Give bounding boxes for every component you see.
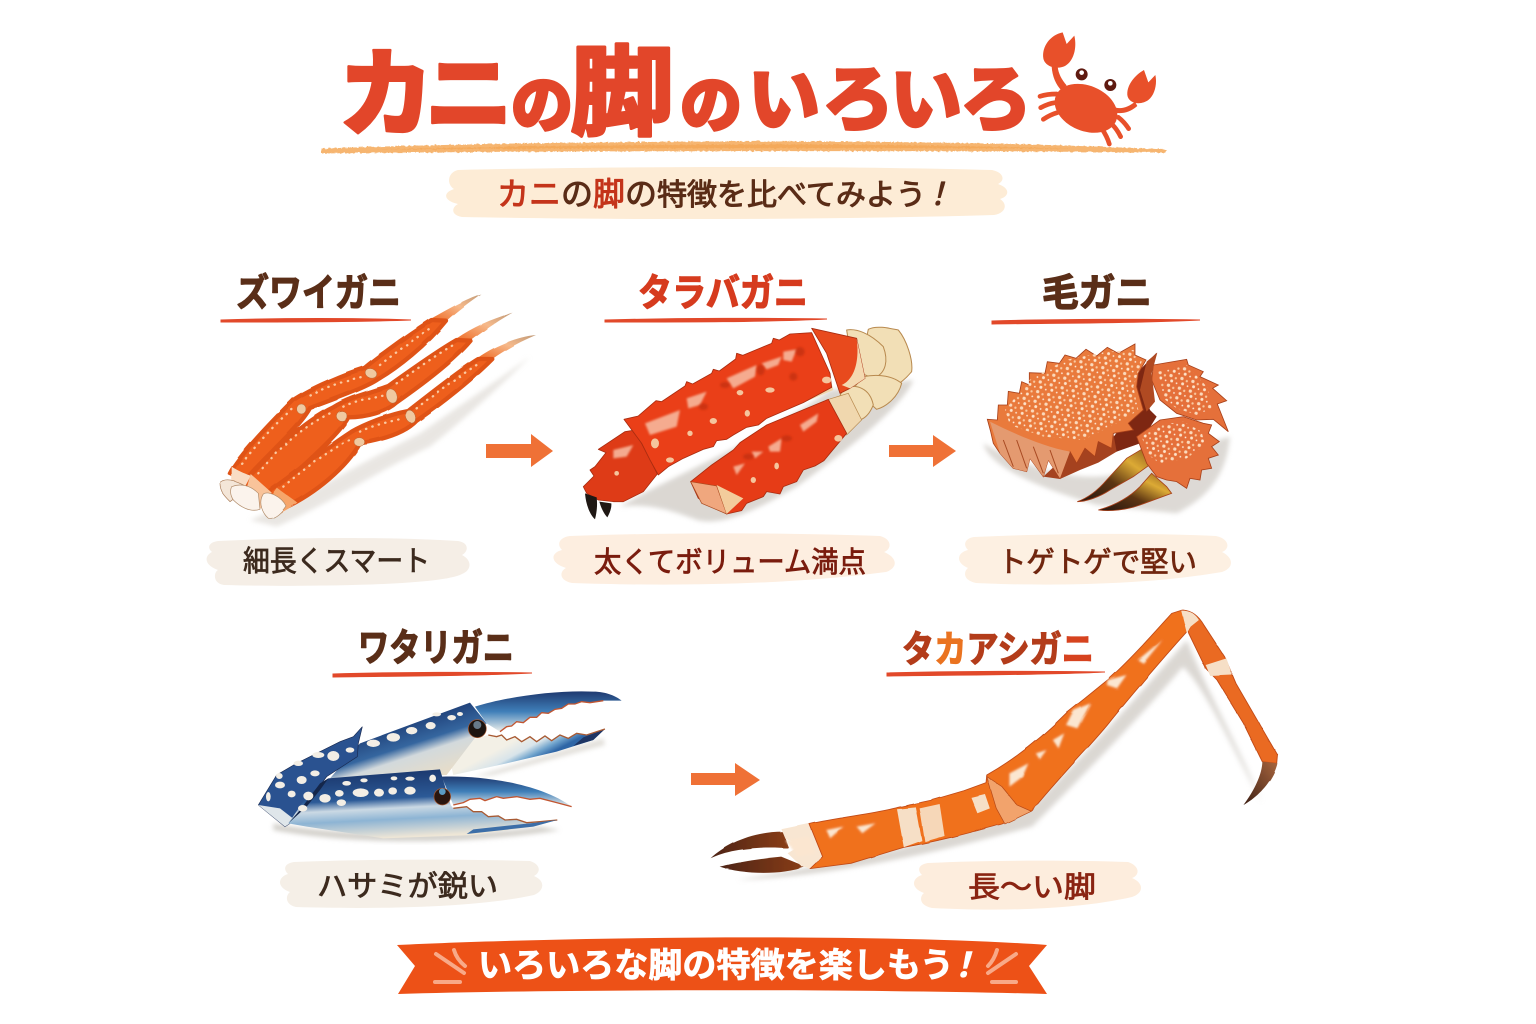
illustration: blue crab claws (258, 691, 622, 841)
caption: 細長くスマート (243, 545, 430, 578)
panel: ズワイガニ (207, 272, 536, 586)
illustration: snow crab legs (220, 294, 536, 527)
title text: い (890, 61, 962, 141)
caption (959, 534, 1231, 585)
panel: ワタリガニ (258, 628, 622, 908)
heading: タカアシガニ (902, 629, 1094, 670)
title text: ニ (425, 45, 513, 144)
caption: 長〜い脚 (968, 871, 1096, 904)
banner text: いろいろな脚の特徴を楽しもう！ (478, 947, 980, 985)
arrow (691, 763, 760, 796)
icon: small crab (1040, 32, 1156, 144)
title text: ろ (822, 61, 894, 141)
illustration: hairy crab leg (983, 344, 1230, 513)
illustration: king crab legs (583, 327, 913, 521)
arrow (486, 434, 553, 467)
title text: い (748, 61, 820, 141)
heading: 毛ガニ (1042, 273, 1152, 315)
title kanji: 脚 (570, 38, 675, 148)
subtitle ribbon (446, 167, 1007, 219)
caption: ハサミが鋭い (317, 870, 498, 903)
footer banner (397, 937, 1047, 994)
title (323, 32, 1166, 152)
caption: 太くてボリューム満点 (594, 546, 866, 579)
illustration: spider crab leg (711, 610, 1277, 880)
caption (207, 538, 470, 586)
title text: カ (338, 42, 434, 149)
panel: タラバガニ (553, 273, 913, 585)
title text: の (511, 72, 573, 141)
caption (553, 533, 895, 585)
subtitle text: カニ (497, 176, 561, 212)
heading: ワタリガニ (358, 628, 514, 670)
caption (280, 860, 542, 908)
heading: ズワイガニ (236, 272, 401, 315)
panel: 毛ガニ (959, 273, 1231, 585)
arrow (889, 435, 956, 467)
panel: タカアシガニ (711, 610, 1277, 910)
title underline (323, 143, 1166, 152)
caption (914, 861, 1141, 910)
title text: ろ (960, 61, 1032, 141)
title text: の (680, 72, 742, 141)
heading: タラバガニ (638, 273, 808, 315)
subtitle text: の脚の特徴を比べてみよう！ (561, 176, 953, 212)
caption: トゲトゲで堅い (998, 547, 1197, 579)
